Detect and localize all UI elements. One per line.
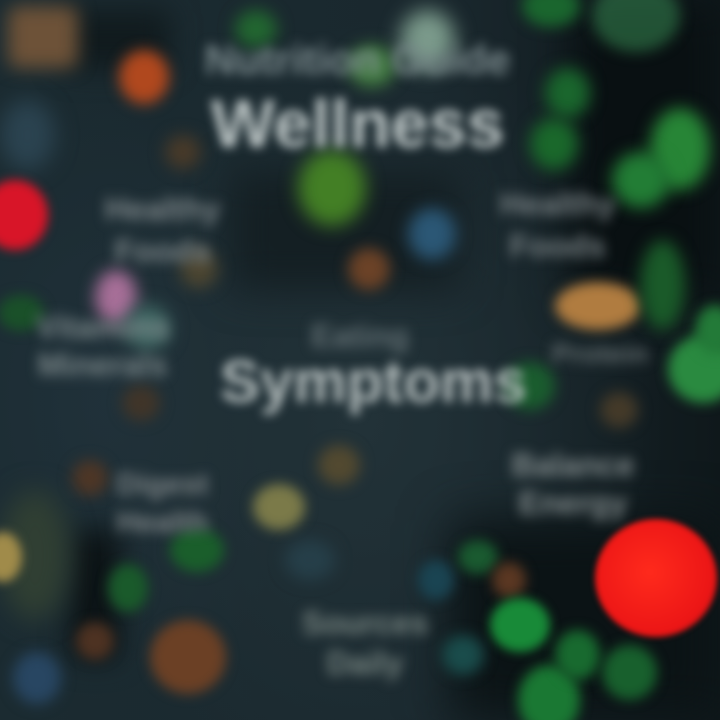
icon: green small	[108, 564, 148, 612]
icon: brown mid right	[600, 392, 638, 428]
icon: top green leaf	[235, 10, 277, 48]
icon: left yellow	[0, 532, 22, 582]
text block: right middle: Protein	[552, 338, 648, 369]
text block: lower right: Balance	[512, 447, 634, 483]
icon: top left brown box	[8, 6, 78, 68]
text block: lower left	[112, 468, 213, 539]
icon: green vine lower	[530, 118, 578, 170]
icon: pink figure	[95, 270, 137, 324]
dark area right top	[570, 0, 720, 300]
text block: lower right	[506, 447, 639, 527]
icon: tan arch	[555, 282, 641, 330]
icon: green vine upper	[545, 68, 590, 118]
icon: pale top shape	[400, 10, 455, 70]
text block: upper right	[495, 186, 620, 264]
icon: green mid	[505, 362, 555, 410]
icon: brown center	[348, 248, 390, 290]
text block: left middle	[32, 309, 172, 383]
text block: upper left: Healthy	[105, 191, 220, 227]
text block: left middle: Minerals	[38, 347, 167, 383]
icon: small tan	[180, 250, 218, 288]
text block: upper left	[100, 191, 224, 269]
icon: teal near red	[418, 560, 454, 600]
icon: center green leaf	[298, 150, 366, 226]
icon: blue bottom left	[13, 652, 61, 704]
text block: bottom center: Daily	[327, 645, 403, 681]
icon: brown circle	[150, 620, 226, 694]
icon: teal shape	[125, 305, 170, 350]
icon: left blue shape	[0, 100, 55, 170]
dark area bottom right	[450, 520, 720, 720]
icon: green under title	[348, 45, 396, 87]
icon: yellow circle	[253, 484, 305, 530]
dark area top	[60, 10, 170, 70]
icon: green bottom cluster right	[602, 645, 657, 700]
icon: orange fruit	[119, 50, 169, 104]
icon: brown small left	[72, 460, 108, 496]
icon: bright green	[490, 598, 550, 652]
text block: left middle: Vitamins	[36, 309, 169, 345]
icon: green near red	[458, 540, 498, 574]
text block: bottom center	[298, 605, 432, 684]
icon: brown near red	[492, 562, 526, 598]
icon: blue bottom center	[285, 540, 335, 580]
icon: green leaf large	[650, 108, 710, 190]
text block: upper right: Healthy	[500, 186, 615, 222]
icon: olive circle	[318, 445, 360, 485]
icon: green top leaf	[522, 0, 580, 27]
heading: top line: Nutrition Guide	[205, 36, 510, 83]
icon: brown small bottom	[76, 622, 114, 660]
icon: small brown	[165, 135, 201, 169]
text block: upper right: Foods	[510, 228, 605, 264]
icon: green mid right	[640, 240, 685, 330]
icon: green right edge	[668, 335, 720, 403]
text block: lower left: Health	[117, 506, 208, 539]
icon: teal bottom	[442, 635, 484, 675]
icon: green leaf small	[612, 152, 670, 208]
icon: green top right	[592, 0, 680, 52]
icon: blue center	[408, 208, 456, 260]
icon: big red fruit	[595, 519, 717, 637]
text block: lower left: Digest	[117, 468, 208, 501]
text block: bottom center: Sources	[302, 605, 428, 641]
icon: green bottom cluster left	[518, 665, 580, 720]
heading: main title: Wellness	[211, 86, 504, 162]
heading: second small line: Eating	[311, 318, 409, 354]
icon: left green	[0, 295, 44, 331]
icon: green right corner	[695, 305, 720, 355]
heading: second title: Symptoms	[220, 348, 527, 415]
text block: upper left: Foods	[114, 233, 210, 269]
dark area center	[230, 170, 460, 290]
icon: left olive patch	[0, 490, 70, 620]
icon: green circle	[170, 528, 224, 572]
icon: green bottom cluster mid	[555, 630, 600, 680]
icon: brown mid left	[122, 385, 160, 421]
dark area left	[70, 530, 120, 660]
text block: lower right: Energy	[519, 485, 627, 521]
icon: red fruit left	[0, 180, 48, 250]
